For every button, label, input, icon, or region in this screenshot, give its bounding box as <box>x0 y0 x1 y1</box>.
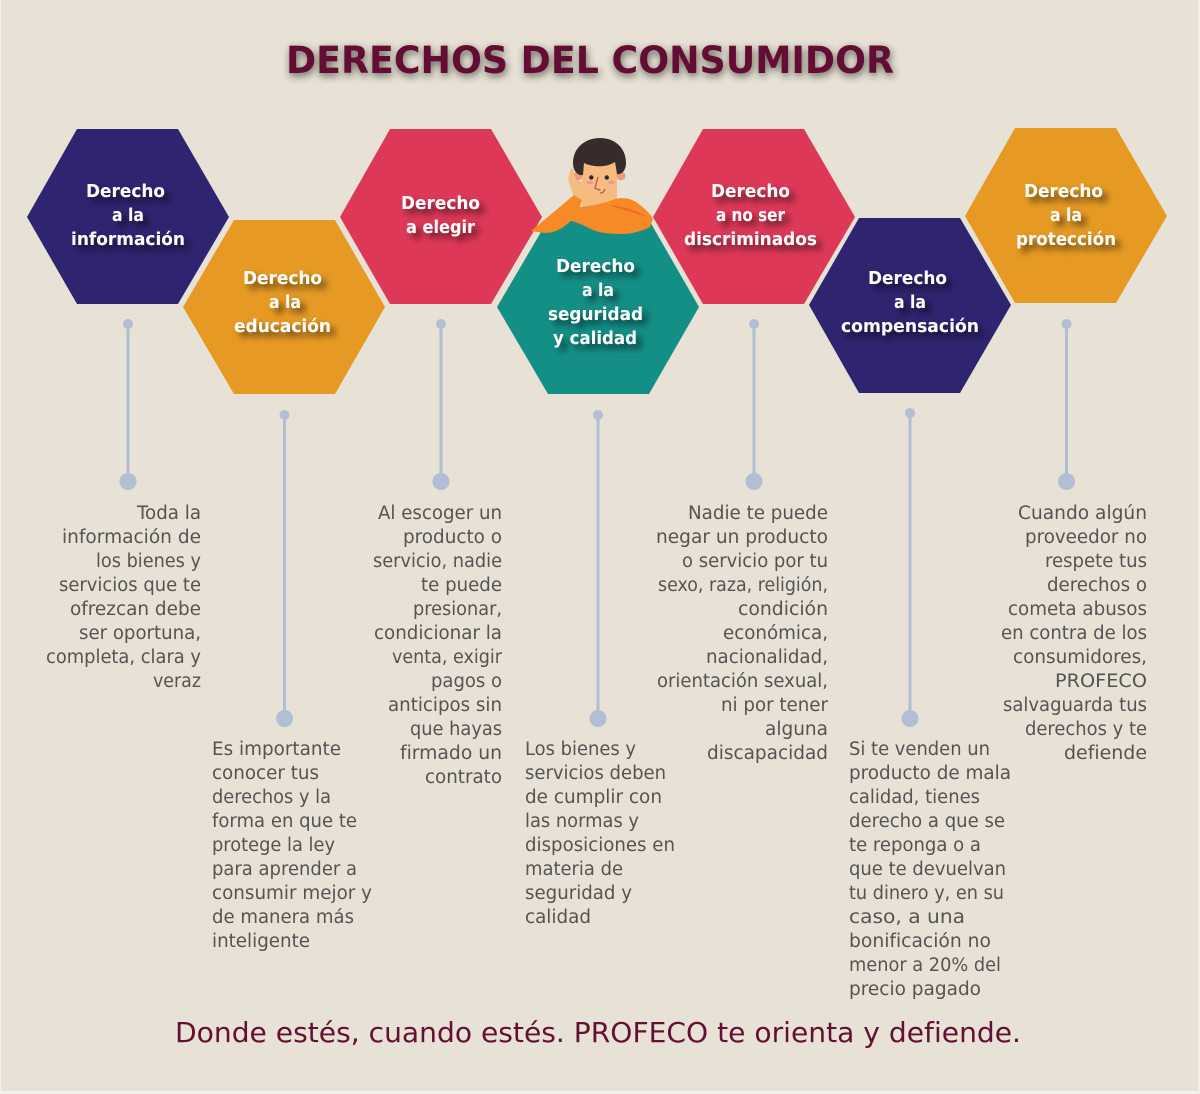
text block: no ser discriminados: negar un producto <box>656 527 828 548</box>
text block: no ser discriminados: alguna <box>765 719 828 740</box>
text block: protección: defiende <box>1064 743 1147 764</box>
text block: elegir: venta, exigir <box>392 647 502 668</box>
text block: información: ser oportuna, <box>79 623 201 644</box>
text block: educación: Es importante <box>212 739 341 760</box>
connector: compensación <box>902 408 918 727</box>
panel: derecho a la seguridad y calidad <box>497 220 699 928</box>
text block: elegir: pagos o <box>431 671 502 692</box>
text block: protección: salvaguarda tus <box>1003 695 1147 716</box>
text block: compensación: que te devuelvan <box>849 859 1006 880</box>
panel: derecho a la información <box>27 129 229 692</box>
heading: derecho a la seguridad y calidad: Derecho <box>556 256 635 277</box>
text block: no ser discriminados: Nadie te puede <box>688 503 828 524</box>
text block: elegir: condicionar la <box>374 623 502 644</box>
text block: seguridad y calidad: servicios deben <box>525 763 666 784</box>
text block: seguridad y calidad: seguridad y <box>525 883 632 904</box>
text block: no ser discriminados: económica, <box>723 623 828 644</box>
panel: derecho a la protección <box>965 128 1167 764</box>
text block: elegir: te puede <box>421 575 502 596</box>
text block: elegir: Al escoger un <box>378 503 502 524</box>
text block: información: veraz <box>153 671 201 692</box>
text block: elegir: contrato <box>425 767 502 788</box>
panel: derecho a no ser discriminados <box>653 129 855 764</box>
hexagon: información <box>27 129 229 304</box>
heading: derecho a la protección <box>1016 181 1116 250</box>
title: DERECHOS DEL CONSUMIDOR <box>286 39 894 82</box>
heading: derecho a la educación <box>234 268 331 337</box>
text block: información: información de <box>62 527 201 548</box>
text block: compensación: Si te venden un <box>849 739 990 760</box>
text block: elegir: firmado un <box>400 743 502 764</box>
text block: compensación: producto de mala <box>849 763 1011 784</box>
text block: información: Toda la <box>136 503 201 524</box>
connector: elegir <box>432 319 450 490</box>
text block: no ser discriminados: discapacidad <box>707 743 828 764</box>
text block: no ser discriminados: orientación sexual, <box>657 671 828 692</box>
heading: derecho a elegir: a elegir <box>406 217 475 238</box>
text block: compensación <box>849 739 1011 1000</box>
heading: derecho a la protección: a la <box>1050 205 1082 226</box>
text block: educación <box>212 739 372 952</box>
heading: derecho a la compensación: Derecho <box>868 268 947 289</box>
text block: educación: protege la ley <box>212 835 335 856</box>
text block: información: ofrezcan debe <box>70 599 201 620</box>
text block: elegir: que hayas <box>410 719 502 740</box>
text block: protección: en contra de los <box>1001 623 1147 644</box>
panel: derecho a la educación <box>183 220 385 952</box>
text block: compensación: caso, a una <box>849 907 965 928</box>
hexagon: elegir <box>340 129 542 304</box>
heading: derecho a la información: Derecho <box>86 181 165 202</box>
text block: compensación: bonificación no <box>849 931 991 952</box>
heading: derecho a elegir: Derecho <box>401 193 480 214</box>
heading: derecho a la información: a la <box>112 205 144 226</box>
text block: seguridad y calidad: calidad <box>525 907 591 928</box>
text block: no ser discriminados: o servicio por tu <box>682 551 828 572</box>
text block: protección: proveedor no <box>1025 527 1147 548</box>
heading: derecho a elegir <box>401 193 480 238</box>
heading: derecho a la protección: protección <box>1016 229 1116 250</box>
text block: información: los bienes y <box>96 551 201 572</box>
text block: información: completa, clara y <box>46 647 201 668</box>
text block: no ser discriminados: sexo, raza, religión, <box>658 575 828 596</box>
connector: educación <box>276 410 293 727</box>
hexagon: seguridad y calidad <box>497 220 699 394</box>
text block: seguridad y calidad: materia de <box>525 859 623 880</box>
icon: character with orange scarf <box>531 138 653 234</box>
text block: compensación: derecho a que se <box>849 811 1005 832</box>
panel: derecho a la compensación <box>809 218 1011 1000</box>
text block: educación: forma en que te <box>212 811 357 832</box>
heading: derecho a no ser discriminados: discriminados <box>684 229 817 250</box>
text block: educación: conocer tus <box>212 763 319 784</box>
text block: seguridad y calidad: las normas y <box>525 811 639 832</box>
text block: información: servicios que te <box>59 575 201 596</box>
text block: compensación: te reponga o a <box>849 835 981 856</box>
text block: protección: respete tus <box>1045 551 1147 572</box>
text block: protección: derechos o <box>1047 575 1147 596</box>
text block: educación: consumir mejor y <box>212 883 372 904</box>
heading: derecho a la protección: Derecho <box>1024 181 1103 202</box>
text block: seguridad y calidad <box>525 739 675 928</box>
text block: compensación: tu dinero y, en su <box>849 883 1004 904</box>
connector: no ser discriminados <box>746 319 762 490</box>
text block: elegir: presionar, <box>413 599 502 620</box>
hexagon: compensación <box>809 218 1011 393</box>
heading: derecho a la compensación <box>841 268 979 337</box>
heading: derecho a la seguridad y calidad: seguridad <box>548 304 643 325</box>
text block: educación: de manera más <box>212 907 354 928</box>
text block: protección <box>1001 503 1147 764</box>
connector: protección <box>1058 319 1075 490</box>
text block: seguridad y calidad: Los bienes y <box>525 739 636 760</box>
text block: protección: derechos y te <box>1025 719 1147 740</box>
text block: protección: PROFECO <box>1055 671 1147 692</box>
heading: derecho a la seguridad y calidad: y calidad <box>553 328 637 349</box>
text block: compensación: menor a 20% del <box>849 955 1001 976</box>
text block: elegir: servicio, nadie <box>373 551 502 572</box>
text block: seguridad y calidad: de cumplir con <box>525 787 662 808</box>
text block: compensación: precio pagado <box>849 979 981 1000</box>
text block: elegir <box>373 503 502 788</box>
hexagon: protección <box>965 128 1167 303</box>
text block: no ser discriminados: condición <box>738 599 828 620</box>
heading: derecho a la compensación: a la <box>894 292 926 313</box>
heading: derecho a la educación: a la <box>269 292 301 313</box>
text block: no ser discriminados: ni por tener <box>721 695 828 716</box>
text block: protección: cometa abusos <box>1008 599 1147 620</box>
text block: compensación: calidad, tienes <box>849 787 980 808</box>
text block: educación: inteligente <box>212 931 310 952</box>
text block: elegir: anticipos sin <box>388 695 502 716</box>
heading: derecho a la compensación: compensación <box>841 316 979 337</box>
heading: derecho a la educación: educación <box>234 316 331 337</box>
text block: educación: derechos y la <box>212 787 331 808</box>
text block: información <box>46 503 201 692</box>
heading: derecho a la educación: Derecho <box>243 268 322 289</box>
connector: seguridad y calidad <box>590 410 606 727</box>
heading: derecho a la información <box>71 181 185 250</box>
heading: derecho a la seguridad y calidad <box>548 256 643 349</box>
hexagon: educación <box>183 220 385 394</box>
heading: derecho a no ser discriminados: a no ser <box>716 205 785 226</box>
text block: protección: consumidores, <box>1013 647 1147 668</box>
text block: no ser discriminados: nacionalidad, <box>706 647 828 668</box>
text block: educación: para aprender a <box>212 859 357 880</box>
hexagon: no ser discriminados <box>653 129 855 304</box>
text block: seguridad y calidad: disposiciones en <box>525 835 675 856</box>
footer slogan: Donde estés, cuando estés. PROFECO te orienta y defiende. <box>175 1017 1021 1049</box>
text block: elegir: producto o <box>403 527 502 548</box>
text block: protección: Cuando algún <box>1018 503 1147 524</box>
heading: derecho a la información: información <box>71 229 185 250</box>
text block: no ser discriminados <box>656 503 828 764</box>
panel: derecho a elegir <box>340 129 542 788</box>
heading: derecho a la seguridad y calidad: a la <box>582 280 614 301</box>
connector: información <box>120 319 136 490</box>
heading: derecho a no ser discriminados <box>684 181 817 250</box>
heading: derecho a no ser discriminados: Derecho <box>711 181 790 202</box>
